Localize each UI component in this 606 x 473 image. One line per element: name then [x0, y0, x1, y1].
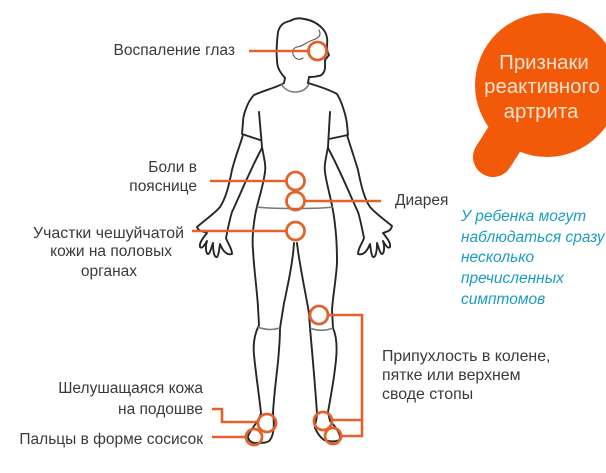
right arm: [328, 135, 392, 257]
callout: peeling skin on sole: Шелушащаяся кожа: [58, 380, 203, 397]
callout: swelling of knee, heel, foot arch: [310, 306, 550, 444]
callout: eye inflammation: Воспаление глаз: [114, 42, 235, 59]
waistband and knees: [257, 207, 333, 330]
note: several symptoms at once: несколько: [461, 249, 535, 266]
badge: signs of reactive arthritis: артрита: [504, 101, 579, 123]
badge: signs of reactive arthritis: [475, 13, 606, 157]
callout: eye inflammation: [114, 42, 326, 60]
callout: lower back pain: Боли в: [148, 159, 197, 176]
feet: [248, 412, 340, 443]
torso right side and outer right leg: [325, 112, 337, 412]
t-shirt: [242, 78, 348, 140]
callout: peeling skin on sole: на подошве: [118, 401, 203, 418]
note: several symptoms at once: пречисленных: [461, 270, 565, 287]
callout: diarrhea: Диарея: [395, 192, 448, 209]
callout: swelling of knee, heel, foot arch: пятке или верхнем: [382, 367, 521, 384]
badge: signs of reactive arthritis: реактивного: [484, 76, 600, 98]
inner left leg: [273, 243, 294, 413]
body figure: [197, 18, 392, 443]
callout: scaly skin on genitals: [33, 222, 304, 280]
callout: lower back pain: пояснице: [129, 178, 197, 195]
callout: swelling of knee, heel, foot arch: своде стопы: [382, 386, 473, 403]
callout: scaly skin on genitals: кожи на половых: [50, 243, 172, 260]
collar: [281, 84, 309, 92]
note: several symptoms at once: симптомов: [461, 291, 545, 308]
callout: scaly skin on genitals: Участки чешуйчатой: [33, 225, 184, 242]
left arm: [197, 135, 262, 257]
callout: sausage-shaped toes: Пальцы в форме сосисок: [19, 431, 203, 448]
head and hair: [277, 18, 329, 83]
callout: lower back pain: [129, 159, 304, 195]
note: several symptoms at once: [460, 208, 606, 308]
note: several symptoms at once: У ребенка могут: [460, 208, 586, 225]
callout: scaly skin on genitals: органах: [81, 263, 137, 280]
callout: diarrhea: [286, 192, 448, 210]
callout: swelling of knee, heel, foot arch: Припухлость в колене,: [382, 348, 550, 365]
inner right leg: [297, 243, 317, 413]
callout: peeling skin on sole: [58, 380, 276, 432]
badge: signs of reactive arthritis: Признаки: [499, 52, 589, 74]
torso left side and outer left leg: [253, 112, 265, 413]
callout: sausage-shaped toes: [19, 429, 262, 448]
note: several symptoms at once: наблюдаться сразу: [461, 229, 606, 246]
hair line: [293, 30, 320, 59]
